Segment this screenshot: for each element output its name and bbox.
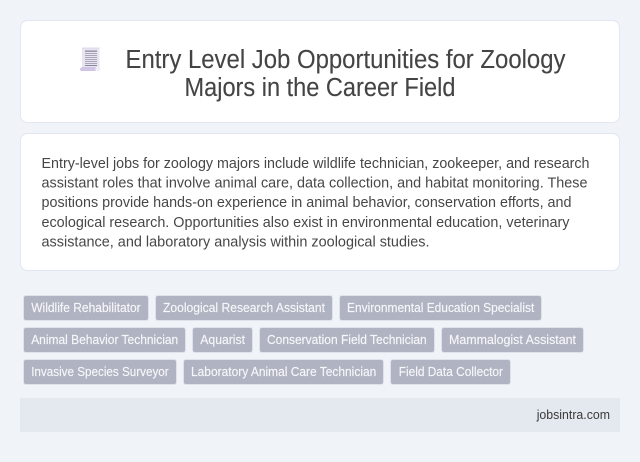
- tag: Animal Behavior Technician: Animal Behavior Technician: [31, 333, 178, 347]
- text block: description: Entry-level jobs for zoology majors include wildlife technician, zookeeper, and research: [42, 156, 590, 172]
- tag: Conservation Field Technician: Conservation Field Technician: [267, 333, 427, 347]
- tag: Mammalogist Assistant: [442, 328, 584, 352]
- tag: Field Data Collector: Field Data Collector: [399, 365, 503, 379]
- panel: title card: [20, 20, 620, 122]
- tag: Aquarist: [192, 328, 252, 352]
- footer bar: [20, 398, 620, 432]
- tag: Mammalogist Assistant: Mammalogist Assistant: [449, 333, 577, 347]
- tag: Environmental Education Specialist: Environmental Education Specialist: [347, 301, 535, 315]
- tag: Environmental Education Specialist: [340, 296, 542, 320]
- tag: Wildlife Rehabilitator: [24, 296, 148, 320]
- tag: Laboratory Animal Care Technician: [184, 360, 384, 384]
- footer: source text: jobsintra.com: [536, 408, 610, 422]
- tag: Zoological Research Assistant: [156, 296, 332, 320]
- tag: Wildlife Rehabilitator: Wildlife Rehabilitator: [31, 301, 141, 315]
- panel: job tags: [24, 296, 584, 384]
- tag: Aquarist: Aquarist: [200, 333, 246, 347]
- heading: title: [126, 46, 566, 102]
- text block: description: positions provide hands-on experience in animal behavior, conservation efforts, and: [42, 195, 572, 211]
- text block: description: ecological research. Opportunities also exist in environmental education, veterinary: [42, 215, 570, 231]
- tag: Animal Behavior Technician: [24, 328, 186, 352]
- tag: Zoological Research Assistant: Zoological Research Assistant: [163, 301, 326, 315]
- icon: paper scroll document: [80, 48, 100, 71]
- tag: Conservation Field Technician: [260, 328, 434, 352]
- tag: Invasive Species Surveyor: [24, 360, 176, 384]
- heading: title: Entry Level Job Opportunities for Zoology: [126, 46, 566, 74]
- heading: title: Majors in the Career Field: [184, 74, 456, 102]
- text block: description: assistance, and laboratory analysis within zoological studies.: [42, 234, 430, 250]
- panel: description card: [20, 134, 620, 270]
- tag: Field Data Collector: [390, 360, 510, 384]
- text block: description: [42, 156, 590, 250]
- tag: Invasive Species Surveyor: Invasive Species Surveyor: [31, 365, 169, 379]
- tag: Laboratory Animal Care Technician: Laboratory Animal Care Technician: [191, 365, 376, 379]
- text block: description: assistant roles that involve animal care, data collection, and habitat monitoring. These: [42, 176, 588, 192]
